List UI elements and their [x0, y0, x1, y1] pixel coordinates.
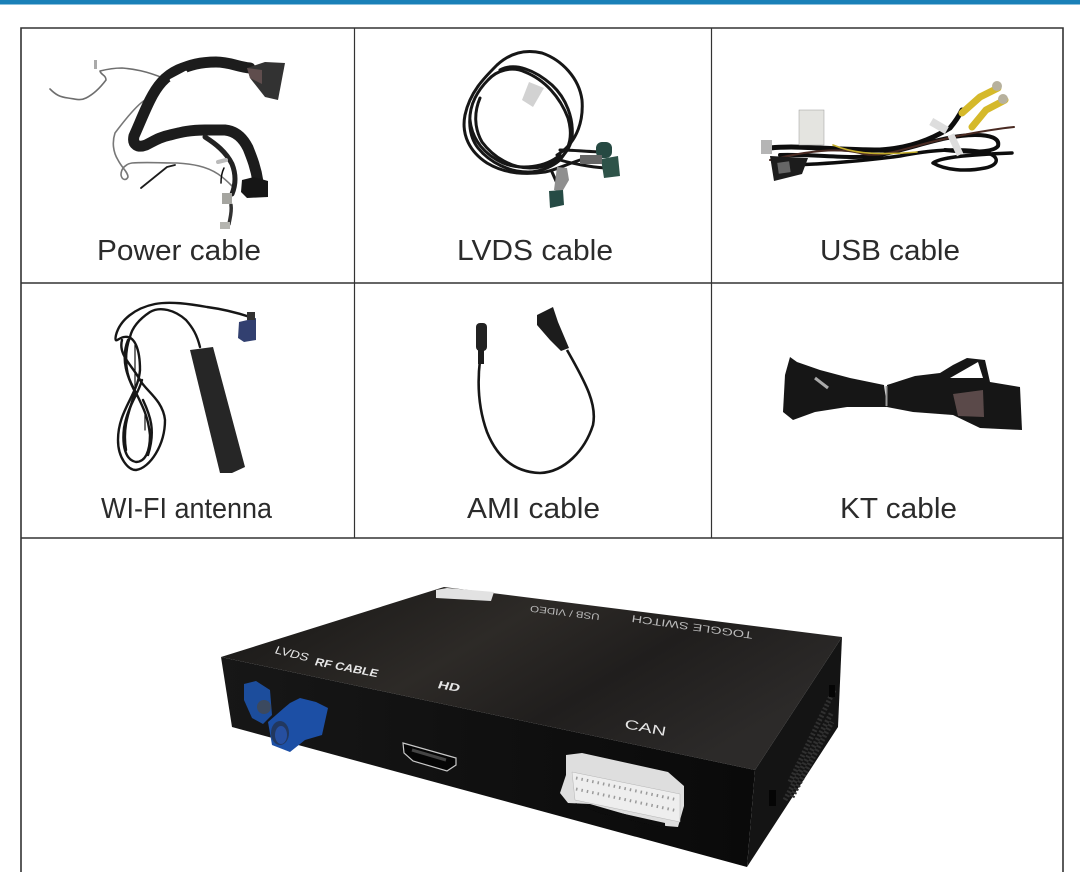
- icon: LVDS cable coil: [464, 52, 605, 190]
- box port labels: [273, 603, 753, 739]
- icon: CAN white connector: [560, 753, 684, 828]
- top accent bar: [0, 0, 1080, 4]
- label: power cable: Power cable: [97, 235, 261, 267]
- label: LVDS cable: LVDS cable: [457, 235, 613, 267]
- icon: LVDS cable connectors: [522, 82, 620, 208]
- box: side face with vents: [747, 637, 842, 867]
- label: USB cable: USB cable: [820, 235, 960, 267]
- panel: main interface box: [221, 587, 842, 867]
- panel: LVDS cable: [457, 52, 620, 267]
- box port labels: LVDS: [273, 645, 311, 664]
- label: Wi-Fi antenna: WI-FI antenna: [101, 493, 273, 525]
- icon: USB cable plugs and labels: [761, 81, 1008, 181]
- panel: USB cable: [761, 81, 1014, 267]
- icon: power cable connectors: [94, 60, 285, 229]
- panel: KT cable: [783, 357, 1022, 525]
- icon: power cable harness: [50, 62, 258, 224]
- icon: AMI cable: [476, 307, 594, 473]
- white sticker on box: [436, 588, 494, 601]
- box port labels: RF CABLE: [313, 657, 380, 680]
- icon: USB cable bundle: [770, 88, 1014, 170]
- box: front face: [221, 657, 755, 867]
- box port labels: HD: [436, 679, 462, 695]
- panel: power cable: [50, 60, 285, 267]
- box port labels: TOGGLE SWITCH: [631, 612, 753, 640]
- panel: Wi-Fi antenna: [101, 303, 273, 525]
- box: top face: [221, 587, 842, 770]
- panel: AMI cable: [467, 307, 600, 525]
- label: KT cable: KT cable: [840, 493, 957, 525]
- label: AMI cable: AMI cable: [467, 493, 600, 525]
- icon: KT cable harness: [783, 357, 1022, 430]
- icon: antenna blade and connector: [190, 312, 256, 473]
- box port labels: CAN: [623, 716, 668, 739]
- box port labels: USB / VIDEO: [530, 603, 600, 622]
- icon: blue Fakra connectors: [244, 681, 328, 752]
- icon: HDMI port: [403, 743, 456, 771]
- icon: antenna wire coil: [115, 303, 250, 470]
